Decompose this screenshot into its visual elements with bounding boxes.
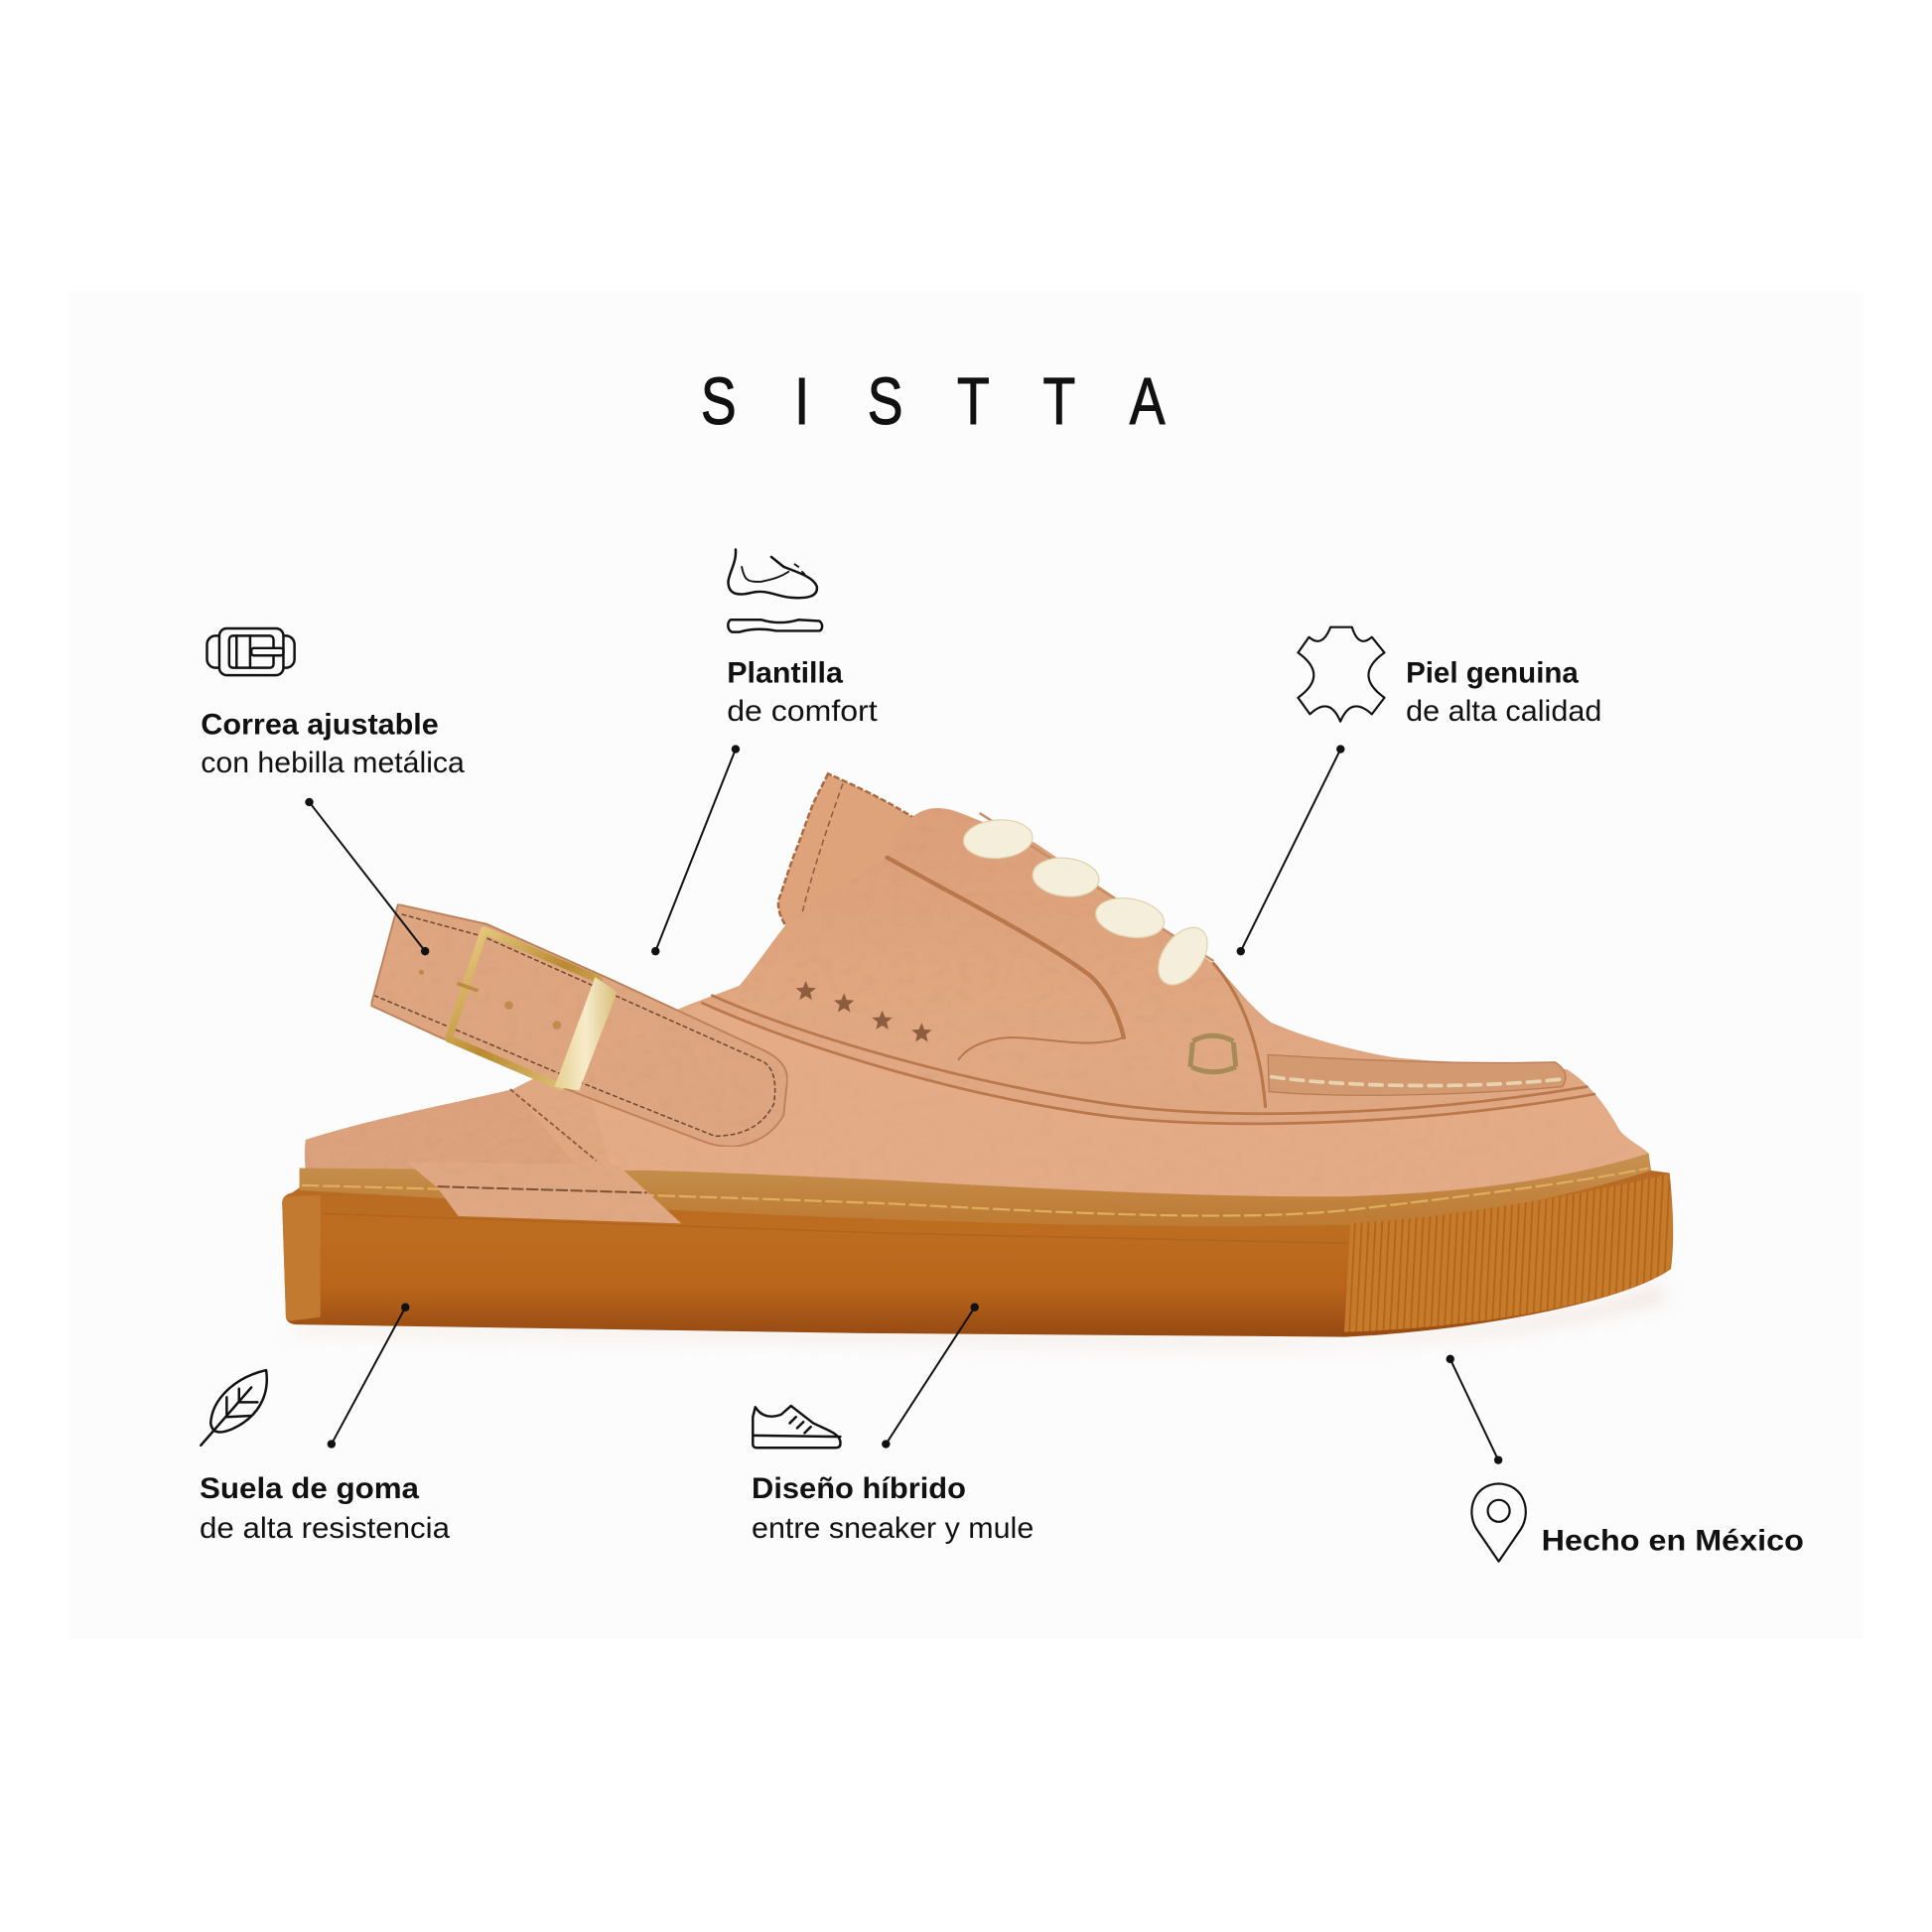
sole midline bbox=[323, 1213, 1349, 1243]
text: piel genuina: de alta calidad bbox=[1406, 695, 1601, 728]
text: diseño híbrido: entre sneaker y mule bbox=[752, 1512, 1034, 1545]
sole body bbox=[282, 1171, 1673, 1337]
moccasin apron seam bbox=[1268, 1054, 1566, 1095]
text: suela de goma: Suela de goma bbox=[200, 1472, 419, 1505]
heel strap seam bbox=[510, 1089, 597, 1161]
icon: map pin bbox=[1471, 1483, 1526, 1562]
text: suela de goma bbox=[200, 1472, 450, 1545]
text: correa ajustable: Correa ajustable bbox=[201, 709, 439, 742]
callout line: suela bbox=[328, 1304, 410, 1449]
lace strand bbox=[980, 813, 1213, 961]
heel tab bbox=[407, 1162, 681, 1223]
product photo: shoe bbox=[282, 773, 1673, 1345]
icon: foot and insole bbox=[728, 550, 822, 632]
text: correa ajustable bbox=[201, 709, 465, 779]
apron stitches bbox=[1272, 1077, 1560, 1085]
ground shadow bbox=[296, 1287, 1663, 1345]
heel block bbox=[282, 1195, 321, 1320]
strap holes bbox=[419, 969, 561, 1030]
star perforations bbox=[795, 981, 931, 1041]
callout line: correa bbox=[305, 798, 429, 955]
metal eyelet bbox=[1190, 1035, 1236, 1072]
text: diseño híbrido: Diseño híbrido bbox=[752, 1472, 966, 1505]
text: suela de goma: de alta resistencia bbox=[200, 1512, 450, 1545]
ribbed toe bumper bbox=[1344, 1174, 1672, 1332]
text: correa ajustable: con hebilla metálica bbox=[201, 747, 465, 779]
strap bbox=[371, 904, 787, 1147]
toe shading bbox=[579, 1003, 1651, 1213]
laces bbox=[962, 818, 1217, 994]
sole welt bbox=[300, 1154, 1651, 1226]
text: diseño híbrido bbox=[752, 1472, 1034, 1545]
text: hecho en méxico: Hecho en México bbox=[1542, 1524, 1804, 1557]
main upper bbox=[512, 808, 1651, 1213]
buckle bbox=[449, 930, 618, 1090]
heel counter bbox=[305, 1089, 617, 1171]
text: piel genuina: Piel genuina bbox=[1406, 657, 1579, 690]
buckle frame bbox=[449, 930, 599, 1087]
text: plantilla: de comfort bbox=[727, 695, 878, 728]
text: plantilla bbox=[727, 657, 878, 728]
strap stitching bbox=[374, 914, 775, 1136]
collar stitching bbox=[801, 783, 843, 918]
buckle pin bbox=[457, 983, 479, 991]
icon: leaf bbox=[201, 1370, 267, 1446]
background panel bbox=[68, 292, 1864, 1639]
back collar with scalloped edge bbox=[778, 773, 914, 939]
icon: sneaker bbox=[753, 1406, 840, 1448]
tab seam bbox=[438, 1186, 647, 1192]
icon: belt buckle bbox=[207, 628, 295, 675]
callout line: hecho en méxico bbox=[1447, 1355, 1502, 1464]
upper seams bbox=[702, 858, 1594, 1124]
title: SISTTA bbox=[701, 363, 1166, 438]
welt stitching bbox=[302, 1169, 1649, 1216]
callout line: diseño bbox=[882, 1304, 979, 1449]
icon: leather hide bbox=[1298, 627, 1384, 722]
callout line: plantilla bbox=[651, 745, 740, 955]
text: plantilla: Plantilla bbox=[727, 657, 843, 690]
text: piel genuina bbox=[1406, 657, 1601, 728]
callout line: piel bbox=[1237, 745, 1345, 955]
buckle bar bbox=[554, 977, 618, 1090]
